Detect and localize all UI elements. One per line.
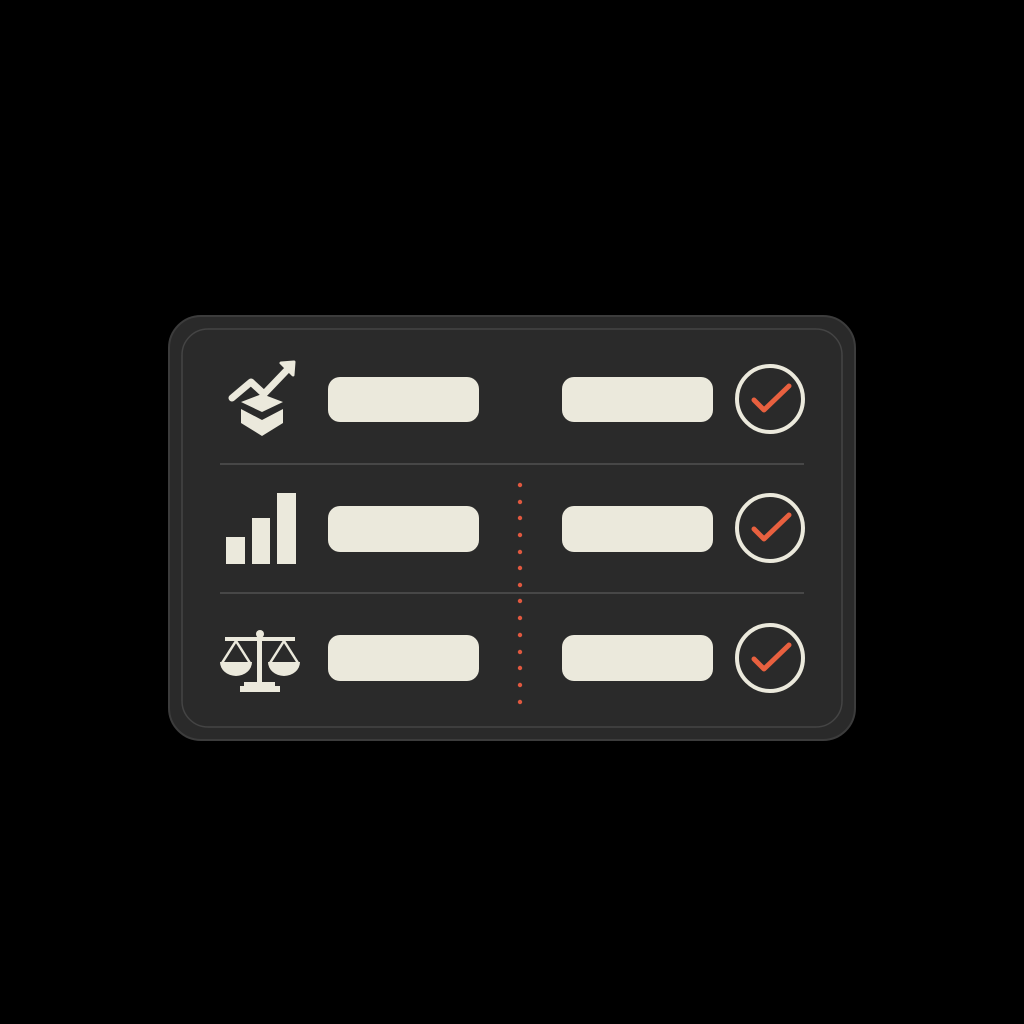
icon: check row 1: [737, 366, 803, 432]
icon: growth layers: [232, 362, 294, 436]
icon: scales: [220, 630, 300, 692]
panel: card: [169, 316, 855, 740]
icon: bar chart: [226, 493, 296, 564]
icon: check row 2: [737, 495, 803, 561]
icon: check row 3: [737, 625, 803, 691]
row 2 pills: [328, 506, 713, 552]
dotted divider: [518, 483, 522, 704]
row 1 pills: [328, 377, 713, 422]
row 3 pills: [328, 635, 713, 681]
